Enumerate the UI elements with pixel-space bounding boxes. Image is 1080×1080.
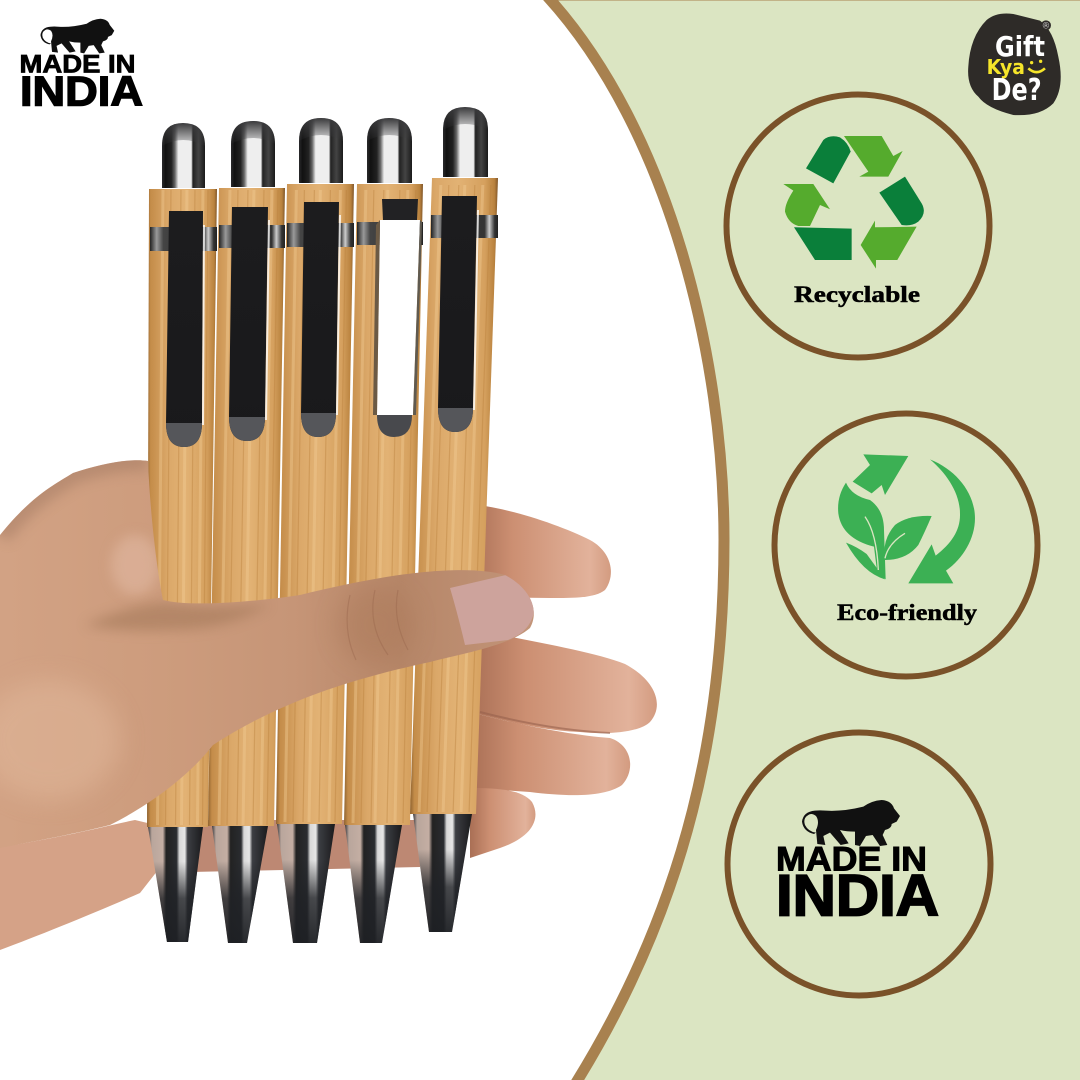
icon: leaf with arrows: [838, 454, 975, 583]
icon: recycle arrows: [783, 136, 924, 269]
brand logo: Gift Kya De: De?: [992, 73, 1042, 108]
pen 5: [410, 107, 498, 932]
pens: [147, 107, 498, 943]
registered mark: ®: [1042, 21, 1050, 31]
made in: MADE IN: [20, 50, 136, 78]
badge: made in india: [728, 732, 990, 996]
hand and pens photo: [0, 107, 657, 950]
palm and thumb in front: [0, 450, 540, 850]
lion: [40, 19, 114, 53]
brand logo: Gift Kya De: Gift: [995, 30, 1045, 63]
made in: MADE IN: [776, 840, 927, 878]
thumbnail: [450, 575, 534, 645]
pen 2: [208, 121, 285, 943]
knuckle shadow: [346, 599, 392, 651]
badge: recyclable: [726, 94, 990, 358]
brand logo: Gift Kya De: [968, 13, 1061, 115]
palm highlight: [0, 680, 120, 800]
india: INDIA: [20, 68, 143, 114]
pen 4: [344, 118, 423, 943]
brand logo: Gift Kya De: Kya: [987, 55, 1025, 79]
label: recyclable: Recyclable: [794, 282, 920, 307]
thumb creases: [347, 590, 408, 660]
smile: [1028, 68, 1045, 72]
label: eco-friendly: Eco-friendly: [837, 600, 978, 625]
fingers behind pens: [150, 504, 657, 872]
badge: eco-friendly: [774, 414, 1038, 676]
fold highlight: [111, 535, 159, 595]
lion silhouette: [802, 800, 900, 846]
made in india logo top-left: [20, 19, 143, 115]
curved green panel: [546, 0, 1080, 1080]
lower palm: [0, 820, 160, 950]
india: INDIA: [776, 864, 939, 928]
pen 1: [147, 123, 217, 942]
thumb web shadow: [85, 602, 270, 630]
back-of-hand edge shade: [0, 460, 148, 535]
pen 3: [276, 118, 354, 943]
